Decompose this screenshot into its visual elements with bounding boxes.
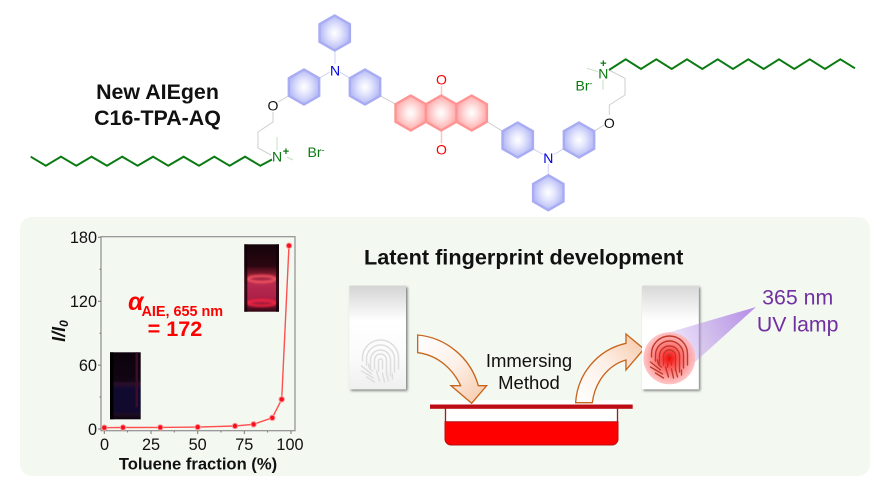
chemical structure: C16-TPA-AQ [31, 16, 855, 210]
left C16 alkyl chain [31, 157, 272, 166]
arrow: into tray [418, 335, 487, 403]
atom labels: N [598, 66, 608, 82]
triphenylamine blue rings, left [289, 16, 380, 104]
y axis labels: 120 [70, 293, 97, 311]
line chart: I/I0 vs toluene fraction [49, 229, 304, 474]
atom labels: Br [576, 78, 590, 94]
heading: New AIEgen C16-TPA-AQ: New AIEgen [96, 80, 219, 104]
heading: Latent fingerprint development: Latent fingerprint development [364, 244, 683, 270]
linker bonds [258, 50, 625, 175]
atom labels: Br [308, 144, 322, 160]
x axis labels: 0 [100, 436, 109, 454]
atom labels: O [436, 72, 447, 88]
methyl bonds [277, 68, 603, 160]
plot frame [101, 237, 295, 431]
annotation: alpha AIE = 172: AIE, 655 nm [142, 304, 223, 320]
text: Immersing Method: Method [498, 372, 560, 393]
atom labels [268, 58, 615, 166]
atom labels: + [600, 58, 607, 70]
anthraquinone red rings [396, 96, 487, 130]
atom labels: + [283, 146, 289, 158]
text: Immersing Method [486, 350, 572, 393]
glowing fingerprint [643, 332, 695, 384]
text: 365 nm UV lamp [757, 286, 839, 336]
y axis labels: 0 [88, 421, 97, 439]
text: Immersing Method: Immersing [486, 350, 572, 371]
atom labels: N [272, 148, 282, 164]
icon: faint fingerprint [362, 340, 398, 382]
card: developed fingerprint under UV [642, 286, 756, 389]
icon: red fingerprint [650, 336, 688, 378]
atom labels: - [590, 78, 592, 88]
axis ticks [98, 237, 291, 434]
right C16 alkyl chain [609, 59, 855, 70]
tray with red solution [430, 400, 633, 445]
atom labels: O [436, 142, 447, 158]
x axis title: Toluene fraction (%) [119, 454, 277, 474]
y axis labels: 180 [70, 229, 97, 247]
card: latent fingerprint substrate [349, 286, 406, 389]
atom labels: N [543, 150, 553, 166]
y axis labels: 60 [79, 357, 97, 375]
text: 365 nm UV lamp: UV lamp [757, 312, 839, 336]
atom labels: N [330, 62, 340, 78]
photo: weak emission vial [110, 352, 141, 419]
heading: New AIEgen C16-TPA-AQ [94, 80, 221, 130]
y axis title: 0 [57, 320, 71, 327]
x axis labels: 100 [276, 436, 304, 454]
x axis labels: 25 [142, 436, 160, 454]
x axis labels: 75 [235, 436, 253, 454]
atom labels: - [322, 145, 324, 155]
annotation: alpha AIE = 172: = 172 [148, 316, 202, 341]
data series [102, 243, 292, 430]
photo: strong emission vial [244, 244, 279, 312]
annotation: alpha AIE = 172: α [128, 288, 145, 316]
triphenylamine blue rings, right [502, 122, 594, 210]
heading: New AIEgen C16-TPA-AQ: C16-TPA-AQ [94, 106, 221, 130]
atom labels: O [268, 98, 279, 114]
atom labels: O [604, 115, 615, 131]
arrow: out of tray [576, 334, 644, 403]
y axis labels [70, 229, 97, 439]
annotation: alpha AIE = 172 [128, 288, 223, 341]
text: 365 nm UV lamp: 365 nm [762, 286, 833, 310]
y axis title: I/I [49, 327, 69, 342]
x axis labels [100, 436, 304, 454]
x axis labels: 50 [189, 436, 207, 454]
panel: green background [20, 217, 870, 476]
UV light beam [660, 307, 756, 363]
